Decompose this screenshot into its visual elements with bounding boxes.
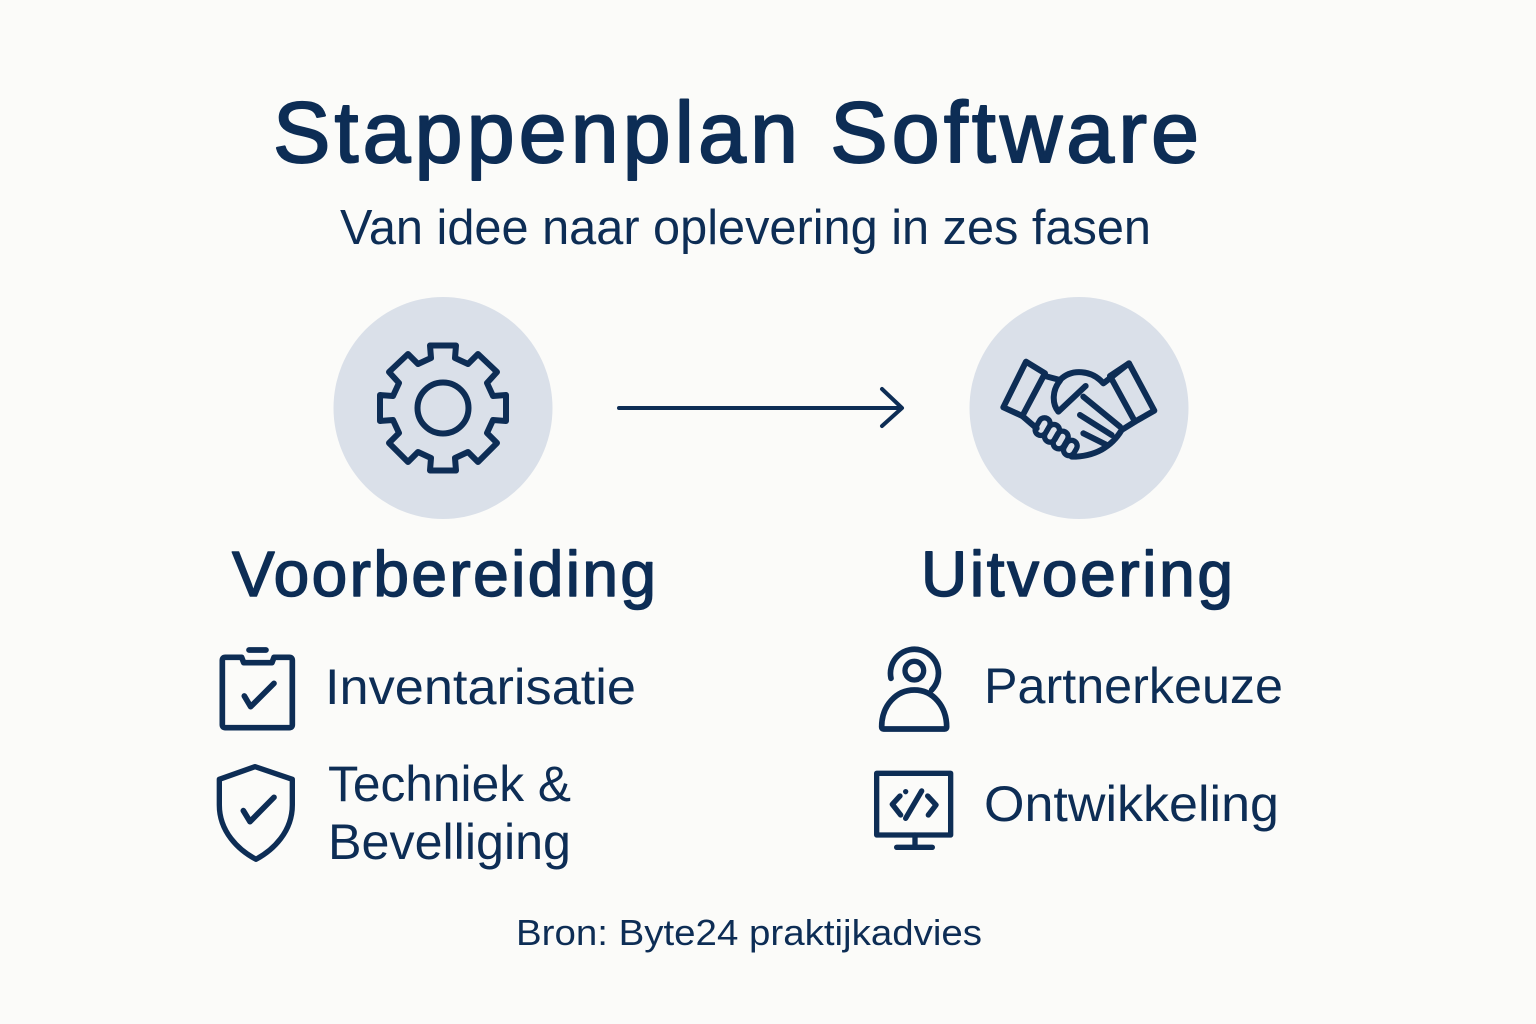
icon: gear in circle [334,297,552,519]
icon: person [882,649,947,729]
source line: Bron: Byte24 praktijkadvies [516,912,982,953]
title: Stappenplan Software [273,85,1199,181]
heading: Uitvoering: Uitvoering [921,538,1233,610]
arrow: from preparation to execution [619,389,902,426]
label: Partnerkeuze: Partnerkeuze [984,658,1283,714]
label: Techniek & Bevelliging [328,756,571,870]
subtitle: Van idee naar oplevering in zes fasen [340,201,1151,255]
label: Techniek & Bevelliging: Techniek & [328,756,571,812]
icon: handshake in circle [970,297,1188,519]
heading: Voorbereiding: Voorbereiding [232,538,656,610]
label: Ontwikkeling: Ontwikkeling [984,776,1279,832]
icon: shield with check [219,767,292,859]
icon: monitor with code [877,773,951,847]
label: Techniek & Bevelliging: Bevelliging [328,814,571,870]
icon: clipboard with check [222,650,292,728]
label: Inventarisatie: Inventarisatie [325,659,636,715]
